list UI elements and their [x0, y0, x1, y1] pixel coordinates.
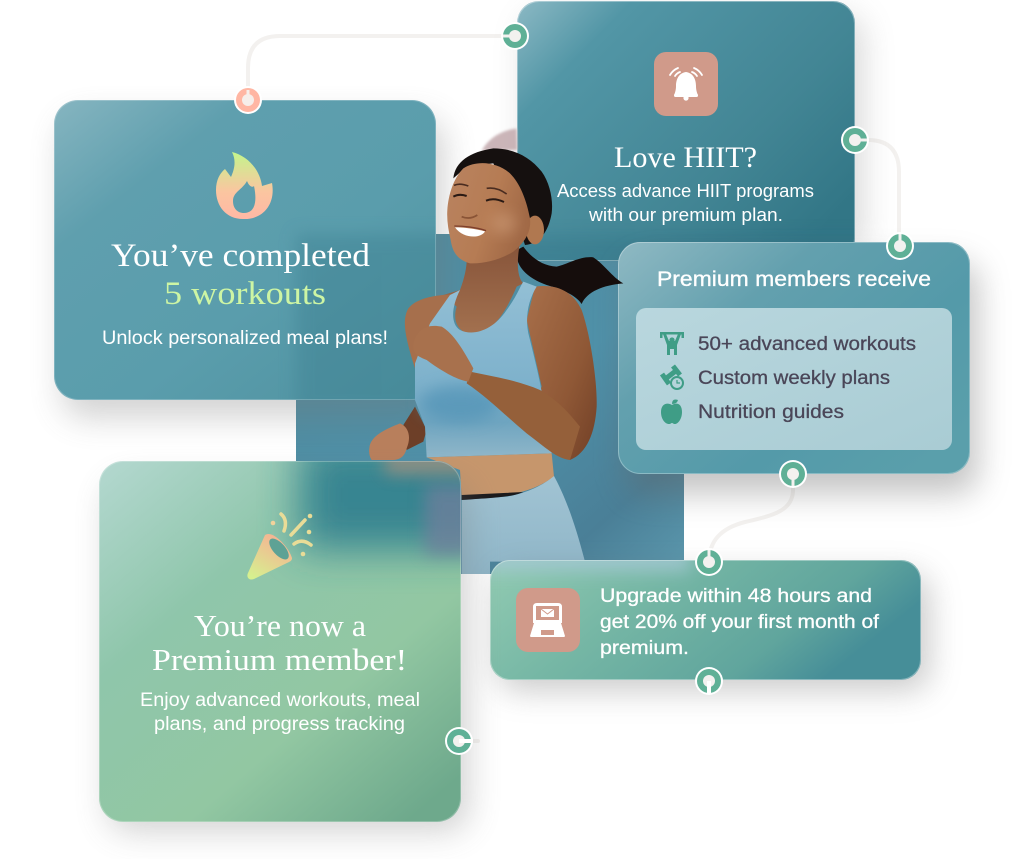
- connector node: flame card top: [234, 86, 262, 114]
- connector node: upgrade card bottom: [695, 667, 723, 695]
- tank shadow: [420, 385, 500, 422]
- panel: premium member welcome: [99, 440, 500, 832]
- ear: [526, 216, 544, 244]
- icon: flame: [216, 152, 273, 219]
- photo: runner: [369, 129, 623, 574]
- icon: apple: [661, 400, 682, 424]
- text: upgrade offer: [600, 585, 880, 659]
- photo background panel: [296, 234, 684, 574]
- hair: [453, 148, 552, 245]
- icon: alarm bell: [654, 52, 718, 116]
- panel: benefits list: [636, 308, 952, 450]
- heading: 5 workouts: 5 workouts: [164, 276, 326, 312]
- left fist: [369, 423, 409, 460]
- connector node: upgrade card top: [695, 548, 723, 576]
- right upper arm: [527, 286, 597, 460]
- nose: [462, 215, 477, 218]
- connector node: premium card bottom: [779, 460, 807, 488]
- waistband: [462, 492, 523, 500]
- heading: now a premium member: Premium member!: [152, 642, 407, 677]
- heading: love HIIT: Love HIIT?: [614, 141, 757, 174]
- text: 50+ advanced workouts: 50+ advanced workouts: [698, 333, 916, 355]
- connector node: premium card top: [886, 232, 914, 260]
- connector node: HIIT card right: [841, 126, 869, 154]
- left shoulder: [405, 294, 453, 368]
- connector node: member card right: [445, 727, 473, 755]
- neck and chest: [443, 243, 523, 335]
- hair wisps: [482, 129, 517, 151]
- hand: [413, 326, 473, 382]
- text: upgrade offer: get 20% off your first month of: [600, 611, 880, 633]
- heading: now a premium member: You’re now a: [194, 608, 366, 643]
- icon: dumbbell and clock: [662, 366, 683, 389]
- heading: you've completed: You’ve completed: [111, 238, 371, 274]
- panel: workouts completed: [54, 100, 456, 418]
- icon: party popper: [247, 514, 312, 580]
- text: enjoy advanced workouts: plans, and progress tracking: [154, 714, 405, 735]
- text: unlock meal plans: Unlock personalized meal plans!: [102, 328, 388, 349]
- text: access advance programs: Access advance HIIT programs: [557, 180, 814, 201]
- text: upgrade offer: premium.: [600, 637, 689, 659]
- smile: [455, 227, 485, 237]
- face: [447, 163, 530, 263]
- leggings: [462, 476, 585, 574]
- panel: love HIIT: [500, 1, 880, 276]
- panel: upgrade offer: [470, 546, 929, 690]
- text: custom weekly plans: Custom weekly plans: [698, 367, 890, 389]
- connector node: HIIT card left: [501, 22, 529, 50]
- brows: [454, 184, 507, 194]
- text: enjoy advanced workouts: Enjoy advanced workouts, meal: [140, 690, 420, 711]
- midriff: [427, 453, 554, 498]
- cheek highlight: [491, 213, 516, 233]
- forearm: [467, 372, 580, 460]
- heading: now a premium member: [152, 608, 407, 677]
- text: nutrition guides: Nutrition guides: [698, 401, 844, 423]
- text: access advance programs: with our premium plan.: [588, 204, 783, 225]
- text: access advance programs: [557, 180, 814, 225]
- icon: laptop with mail: [516, 588, 580, 652]
- icon: weightlifter: [660, 332, 684, 355]
- text: upgrade offer: Upgrade within 48 hours and: [600, 585, 872, 607]
- far arm: [403, 407, 427, 450]
- panel: premium members receive: [618, 242, 978, 494]
- heading: premium members receive: Premium members receive: [657, 267, 931, 291]
- eyes: [453, 195, 504, 202]
- text: enjoy advanced workouts: [140, 690, 420, 735]
- tank top: [415, 282, 552, 457]
- connector lines: [248, 36, 899, 741]
- ponytail: [516, 247, 623, 304]
